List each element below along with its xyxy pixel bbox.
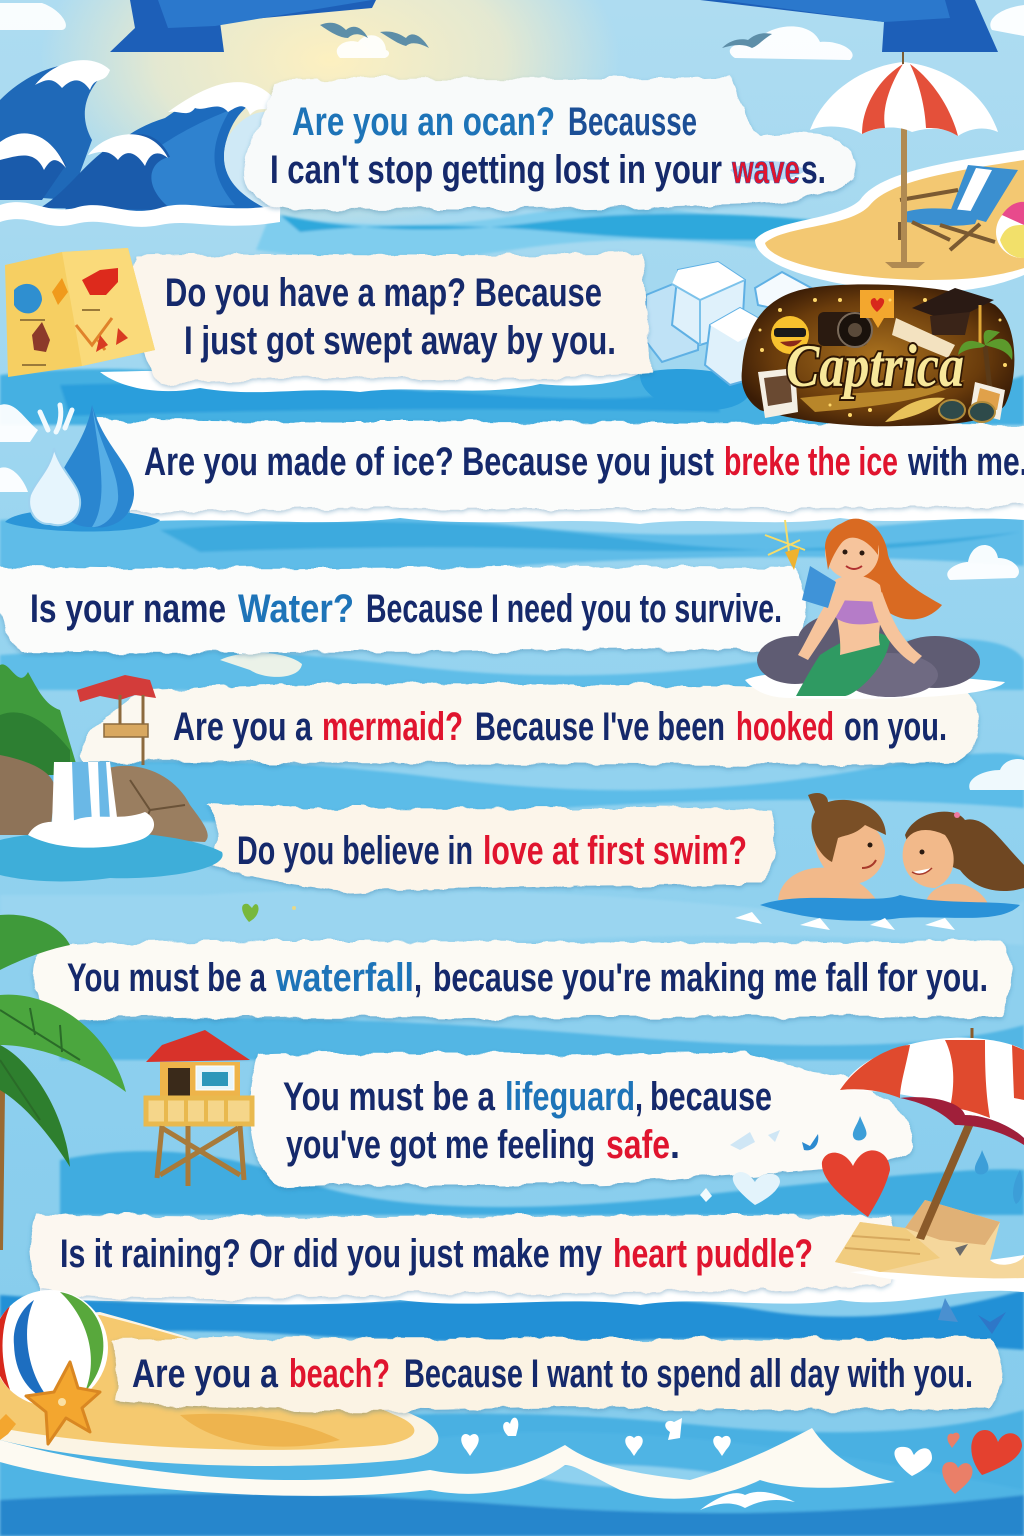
quote text: Water? [238, 587, 354, 631]
quote text: Are you a [132, 1352, 279, 1396]
rocks [757, 612, 980, 697]
icon: palm tree [0, 915, 126, 1250]
pool [0, 831, 223, 881]
wordmark: Captrica [786, 333, 964, 399]
quote text [283, 1075, 772, 1167]
quote text [237, 829, 747, 873]
quote text: Is it raining? Or did you just make my [60, 1232, 603, 1276]
quote text: beach? [289, 1352, 390, 1396]
panel: swim line [205, 805, 775, 892]
graduation cap [912, 288, 994, 345]
quote text: heart puddle? [613, 1232, 813, 1276]
icon: rain drops and splashes [700, 1116, 1023, 1205]
quote text: Are you made of ice? Because you just [144, 440, 714, 484]
photos [758, 368, 1005, 420]
man head [814, 815, 885, 884]
quote text: Do you have a map? Because [165, 271, 602, 315]
paper strip [98, 420, 1024, 512]
quote text: breke the ice [724, 440, 898, 484]
panel: water line [0, 566, 805, 653]
icon: small heart [242, 904, 296, 922]
beach ball (top right) [996, 202, 1024, 258]
quote text: Because I need you to survive. [366, 587, 782, 631]
quote text [30, 587, 782, 631]
head [825, 525, 879, 579]
logo: Captrica badge [742, 284, 1014, 426]
faces [868, 842, 872, 848]
hair ornament [954, 812, 960, 818]
icon: water drop [5, 405, 160, 532]
quote text [132, 1352, 973, 1396]
wave foam base [0, 202, 280, 227]
panel: lifeguard line [249, 1052, 912, 1188]
quote text: You must be a [67, 956, 267, 1000]
icon: couple swimming [735, 793, 1024, 930]
icon: red hearts [942, 1430, 1022, 1494]
panel: rain line [30, 1214, 896, 1298]
icon: large beach umbrella [810, 52, 998, 268]
quote text: Are you an ocan? [292, 100, 555, 144]
quote text: Do you believe in [237, 829, 473, 873]
paper strip [83, 683, 979, 765]
chair [900, 165, 1018, 250]
feather [885, 398, 945, 422]
quote text: Are you a [173, 705, 313, 749]
quote text: Becausse [568, 100, 697, 144]
quote text: Because I've been [475, 705, 725, 749]
sparkles [758, 298, 1007, 417]
swoosh [800, 380, 965, 412]
camera [818, 312, 872, 347]
paper strip [112, 1338, 1002, 1411]
paper strip [33, 940, 1013, 1020]
quote text: Is your name [30, 587, 226, 631]
icon: beach ball bottom left [0, 1290, 108, 1406]
paper strip [30, 1214, 896, 1298]
paper strip [0, 566, 805, 653]
hair back [834, 519, 942, 619]
quote text: you've got me feeling [286, 1123, 595, 1167]
water [760, 895, 1020, 921]
rocks [0, 755, 55, 835]
quote text: I can't stop getting lost in your [270, 148, 722, 192]
quote text: I just got swept away by you. [184, 319, 616, 363]
icon: seagulls [320, 23, 772, 48]
icon: map [5, 248, 155, 377]
panel: mermaid line [83, 683, 979, 765]
quote text: love at first swim? [483, 829, 747, 873]
quote text: You must be a [283, 1075, 496, 1119]
panel: beach line [112, 1338, 1002, 1411]
canopy [77, 675, 156, 702]
woman hair [905, 812, 1024, 891]
foam [28, 812, 154, 848]
quote text [173, 705, 947, 749]
quote text: s. [801, 148, 826, 192]
quote text: . [670, 1123, 680, 1167]
icon: white foam wave bottom [0, 1428, 895, 1510]
trees [0, 664, 78, 770]
diploma [892, 318, 955, 358]
paper strip [133, 253, 652, 384]
paper strip [205, 805, 775, 892]
quote text: , [414, 956, 422, 1000]
paper strip [245, 76, 855, 212]
foam under strips [40, 366, 1024, 1305]
quote text: hooked [736, 705, 834, 749]
quote text [270, 100, 826, 192]
panel: waterfall line [33, 940, 1013, 1020]
icon: lifeguard tower [146, 1030, 252, 1186]
quote text: on you. [844, 705, 947, 749]
sunglasses [939, 400, 995, 422]
icon: beach sand bottom [0, 1312, 438, 1466]
palm [958, 330, 1013, 390]
quote text [67, 956, 988, 1000]
waterfall [52, 762, 118, 825]
starburst and sign [765, 520, 805, 560]
panels: torn paper with quotes [0, 76, 1024, 1298]
woman shoulders [925, 884, 990, 910]
quote text: lifeguard [505, 1075, 635, 1119]
quote text: mermaid? [322, 705, 463, 749]
icon: striped umbrella [840, 1028, 1024, 1240]
clouds [0, 3, 1024, 790]
man shoulders [778, 868, 880, 905]
icon: starfish [0, 1362, 100, 1444]
icon: sand castle [835, 1200, 1024, 1292]
panel: map line [133, 253, 652, 384]
tail [796, 633, 890, 696]
icon: small hearts [461, 1298, 1006, 1476]
arms [798, 590, 922, 664]
icon: red heart [822, 1150, 890, 1217]
quote text: wave [731, 148, 800, 192]
paper strip [249, 1052, 912, 1188]
smiley [771, 316, 809, 354]
quote text: , [635, 1075, 643, 1119]
top ribbon banner [110, 0, 998, 52]
icon: ice cubes [640, 262, 815, 410]
water foam [745, 671, 1005, 699]
body [834, 575, 882, 655]
quote text: because [650, 1075, 772, 1119]
panel: ice line [98, 420, 1024, 512]
woman head [903, 830, 954, 888]
wave foam crests [0, 60, 274, 170]
icon: waterfall cove [0, 664, 223, 881]
quote text: safe [606, 1123, 670, 1167]
quote text: waterfall [275, 956, 414, 1000]
icon: big ocean wave [0, 60, 290, 227]
icon: mermaid on rock [745, 519, 1005, 699]
icon: beach island with chair and ball [755, 150, 1024, 292]
chat bubble heart [860, 290, 894, 328]
panel: ocean line [245, 76, 855, 212]
quote text [165, 271, 616, 363]
